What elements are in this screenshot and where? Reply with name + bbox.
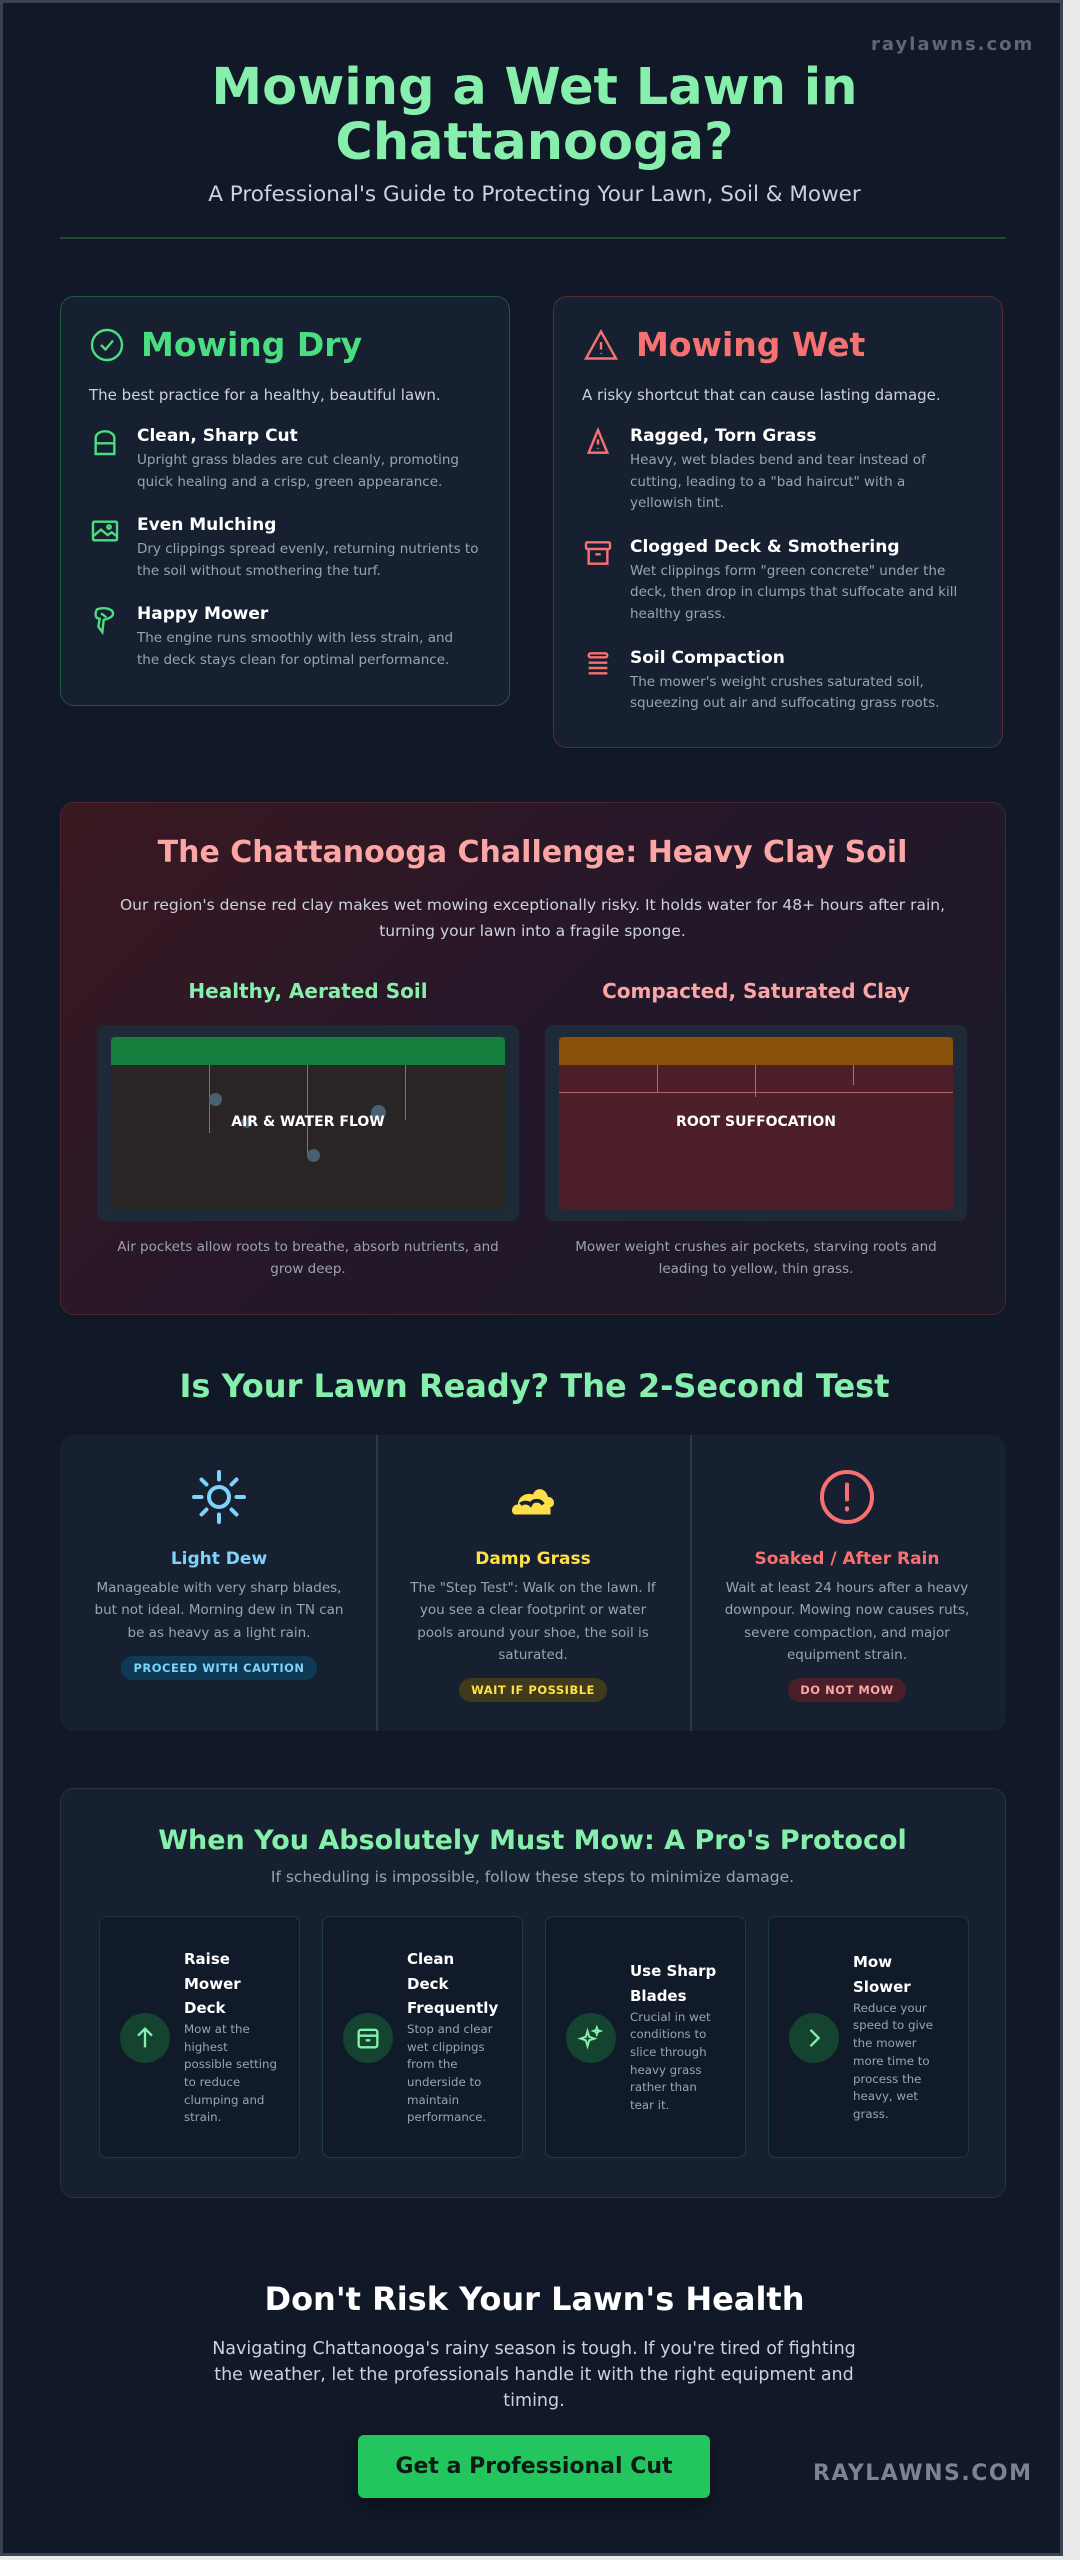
diagram: healthy soil: Healthy, Aerated Soil xyxy=(188,979,428,1003)
panel: mowing wet xyxy=(553,296,1003,748)
step: sharp blades xyxy=(545,1916,746,2158)
heading: protocol: When You Absolutely Must Mow: A Pro's Protocol xyxy=(158,1825,907,1856)
column: damp grass: WAIT IF POSSIBLE xyxy=(471,1683,595,1697)
step: sharp blades: Blades xyxy=(630,1987,687,2005)
column: damp grass: Damp Grass xyxy=(475,1549,591,1569)
column: damp grass: The "Step Test": Walk on the lawn. If you see a clear footprint or water pools around your shoe, the soil is saturated. xyxy=(410,1580,656,1663)
panel: mowing dry xyxy=(60,296,510,706)
step: raise deck xyxy=(99,1916,300,2158)
diagram: compacted clay xyxy=(545,979,967,1277)
column: light dew: PROCEED WITH CAUTION xyxy=(133,1661,305,1675)
panel: protocol: If scheduling is impossible, follow these steps to minimize damage. xyxy=(271,1868,794,1886)
heading: CTA: Don't Risk Your Lawn's Health xyxy=(264,2280,804,2318)
watermark bottom: RAYLAWNS.COM xyxy=(813,2461,1032,2486)
item: torn grass: Heavy, wet blades bend and tear instead of cutting, leading to a "bad haircut" with a yellowish tint. xyxy=(630,452,926,511)
step: clean deck xyxy=(322,1916,523,2158)
item: mulching: Even Mulching xyxy=(137,515,276,535)
item: happy mower: The engine runs smoothly with less strain, and the deck stays clean for optimal performance. xyxy=(137,630,453,668)
heading: mowing dry: Mowing Dry xyxy=(141,325,362,364)
step: raise deck: Mower xyxy=(184,1975,241,1993)
column: soaked: Wait at least 24 hours after a heavy downpour. Mowing now causes ruts, severe compaction, and major equipment strain. xyxy=(725,1580,969,1663)
watermark top: raylawns.com xyxy=(871,34,1034,55)
diagram: healthy soil: AIR & WATER FLOW xyxy=(231,1114,385,1130)
button xyxy=(358,2435,710,2498)
step: clean deck: Clean xyxy=(407,1950,454,1968)
item: happy mower: Happy Mower xyxy=(137,604,268,624)
column: soaked: DO NOT MOW xyxy=(800,1683,894,1697)
clay intro text: Our region's dense red clay makes wet mowing exceptionally risky. It holds water for 48+ hours after rain, turning your lawn into a fragile sponge. xyxy=(120,896,945,940)
diagram: healthy soil xyxy=(97,979,519,1277)
column: soaked: Soaked / After Rain xyxy=(754,1549,940,1569)
step: mow slower: Reduce your speed to give the mower more time to process the heavy, wet grass. xyxy=(853,2001,933,2121)
panel: mowing wet: A risky shortcut that can cause lasting damage. xyxy=(582,386,941,404)
item: compaction: Soil Compaction xyxy=(630,648,785,668)
step: mow slower xyxy=(768,1916,969,2158)
step: raise deck: Mow at the highest possible setting to reduce clumping and strain. xyxy=(184,2022,277,2124)
item: happy mower xyxy=(94,604,453,668)
heading: clay: The Chattanooga Challenge: Heavy Clay Soil xyxy=(158,835,907,870)
item: torn grass xyxy=(586,426,926,511)
panel: mowing dry: The best practice for a healthy, beautiful lawn. xyxy=(89,386,441,404)
panel: test xyxy=(60,1435,1006,1731)
step: sharp blades: Crucial in wet conditions to slice through heavy grass rather than tear it. xyxy=(630,2010,711,2112)
item: mulching xyxy=(92,515,478,579)
step: clean deck: Frequently xyxy=(407,1999,498,2017)
title xyxy=(211,58,858,172)
column: soaked xyxy=(725,1470,969,1702)
step: mow slower: Mow xyxy=(853,1953,892,1971)
step: raise deck: Raise xyxy=(184,1950,230,1968)
diagram: compacted clay: Mower weight crushes air pockets, starving roots and leading to yellow, thin grass. xyxy=(575,1239,937,1277)
heading: lawn ready test: Is Your Lawn Ready? The 2-Second Test xyxy=(179,1367,890,1405)
item: clogged deck: Wet clippings form "green concrete" under the deck, then drop in clumps that suffocate and kill healthy grass. xyxy=(630,563,957,622)
title: Mowing a Wet Lawn in xyxy=(211,58,858,117)
column: light dew: Light Dew xyxy=(171,1549,267,1569)
item: clean cut: Clean, Sharp Cut xyxy=(137,426,298,446)
column: damp grass xyxy=(410,1489,656,1702)
step: clean deck: Stop and clear wet clippings from the underside to maintain performance. xyxy=(407,2022,493,2124)
item: clogged deck: Clogged Deck & Smothering xyxy=(630,537,900,557)
item: clean cut: Upright grass blades are cut cleanly, promoting quick healing and a crisp, green appearance. xyxy=(137,452,459,490)
diagram: compacted clay: Compacted, Saturated Clay xyxy=(602,979,910,1003)
item: clogged deck xyxy=(584,537,957,622)
step: raise deck: Deck xyxy=(184,1999,226,2017)
item: compaction: The mower's weight crushes saturated soil, squeezing out air and suffocating grass roots. xyxy=(630,674,939,711)
button: Get a Professional Cut xyxy=(395,2454,673,2479)
panel: protocol xyxy=(60,1788,1006,2198)
panel: clay challenge xyxy=(60,802,1006,1315)
item: torn grass: Ragged, Torn Grass xyxy=(630,426,816,446)
column: light dew xyxy=(94,1470,343,1680)
subtitle: A Professional's Guide to Protecting Your Lawn, Soil & Mower xyxy=(208,182,861,207)
CTA text: Navigating Chattanooga's rainy season is tough. If you're tired of fighting the weather, let the professionals handle it with the right equipment and timing. xyxy=(212,2339,856,2411)
heading: mowing wet: Mowing Wet xyxy=(636,325,865,364)
item: clean cut xyxy=(94,426,459,490)
title: Chattanooga? xyxy=(335,113,734,172)
step: sharp blades: Use Sharp xyxy=(630,1962,716,1980)
item: compaction xyxy=(588,648,939,711)
column: light dew: Manageable with very sharp blades, but not ideal. Morning dew in TN can be as heavy as a light rain. xyxy=(94,1580,343,1641)
step: clean deck: Deck xyxy=(407,1975,448,1993)
diagram: compacted clay: ROOT SUFFOCATION xyxy=(676,1114,836,1130)
item: mulching: Dry clippings spread evenly, returning nutrients to the soil without smothering the turf. xyxy=(137,541,478,579)
diagram: healthy soil: Air pockets allow roots to breathe, absorb nutrients, and grow deep. xyxy=(117,1239,499,1277)
step: mow slower: Slower xyxy=(853,1978,911,1996)
